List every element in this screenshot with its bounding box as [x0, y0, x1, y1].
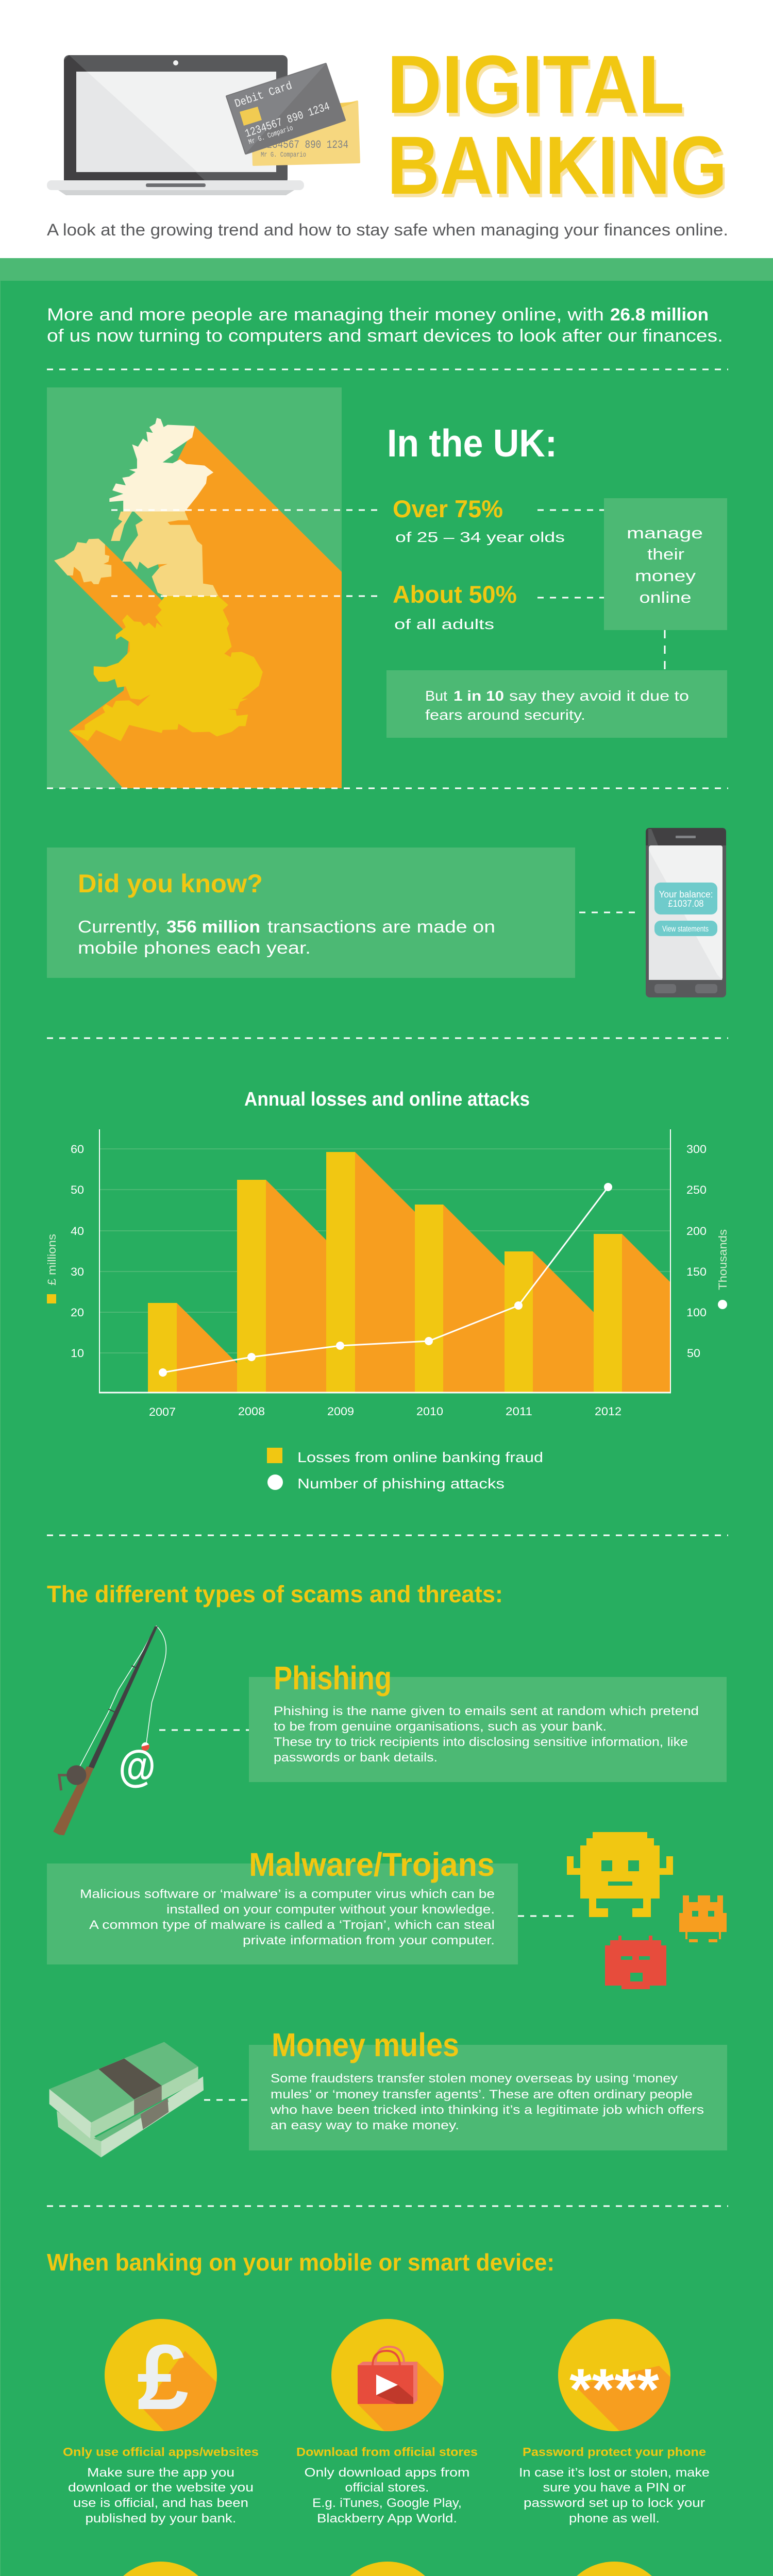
right axis labels: 200 — [686, 1225, 707, 1238]
icon: IMEI — [577, 2562, 652, 2576]
tip: password protect: phone as well. — [569, 2512, 660, 2526]
tip: official apps — [63, 2319, 259, 2526]
right axis labels: 150 — [686, 1265, 707, 1278]
title: DIGITAL — [389, 42, 686, 134]
left axis labels — [71, 1143, 84, 1360]
title: BANKING — [387, 119, 727, 211]
right axis labels: 300 — [686, 1143, 707, 1156]
balance button: Your balance: — [659, 889, 713, 900]
bars: online banking fraud losses — [148, 1152, 622, 1392]
right axis labels — [686, 1143, 707, 1360]
panel: malware: Malicious software or ‘malware’ is a computer virus which can be — [80, 1887, 495, 1901]
icon: phone — [646, 828, 726, 997]
chart title: Annual losses and online attacks — [244, 1089, 530, 1110]
tip: official apps: use is official, and has been — [73, 2496, 248, 2510]
chart legend: Number of phishing attacks — [297, 1476, 505, 1492]
icon: money stack — [49, 2042, 204, 2157]
icon: grey debit card: 1234567 890 1234 — [243, 100, 331, 141]
tip: password protect: password set up to lock your — [524, 2496, 705, 2510]
panel: 1 in 10: 1 in 10 — [453, 688, 504, 704]
panel: money mules: an easy way to make money. — [271, 2119, 459, 2132]
panel: phishing: Phishing is the name given to emails sent at random which pretend — [274, 1704, 699, 1718]
panel: money mules: who have been tricked into thinking it’s a legitimate job which offers — [270, 2103, 704, 2117]
heading: In the UK: In the UK: — [387, 421, 557, 465]
icon: shopping bag — [331, 2319, 444, 2431]
balance button: £1037.08 — [668, 899, 704, 909]
tip: official stores: Only download apps from — [304, 2466, 470, 2480]
right axis title: Thousands — [716, 1229, 729, 1290]
intro text — [47, 305, 723, 346]
tip: official stores: E.g. iTunes, Google Play, — [312, 2496, 462, 2510]
year labels: 2008 — [238, 1405, 265, 1418]
tip: official stores: Blackberry App World. — [317, 2512, 457, 2526]
panel: did you know: mobile phones each year. — [78, 938, 311, 957]
bar shadows — [177, 1152, 670, 1392]
icon: fishing rod — [53, 1626, 166, 1835]
intro text: 26.8 million — [610, 305, 709, 325]
icon: orange monster — [679, 1895, 727, 1942]
tip: official apps: download or the website you — [68, 2481, 254, 2495]
panel: manage their money online: their — [647, 545, 684, 563]
icon: red monster — [605, 1936, 666, 1989]
tip: official stores: official stores. — [345, 2481, 429, 2495]
panel: did you know: 356 million — [166, 917, 260, 936]
panel: phishing: Phishing — [274, 1659, 392, 1697]
icon: yellow bank card: Mr G. Compario — [261, 151, 306, 159]
icon: refresh arrows — [123, 2562, 198, 2576]
panel: did you know: transactions are made on — [267, 917, 495, 936]
tip: write down IMEI — [577, 2562, 652, 2576]
panel: malware — [47, 1846, 518, 1964]
panel: money mules: mules’ or ‘money transfer agents’. These are often ordinary people — [271, 2088, 693, 2102]
icon: reset button — [350, 2562, 425, 2576]
icon: grey debit card — [227, 64, 345, 154]
map of the UK — [54, 418, 263, 741]
map shadow — [54, 426, 342, 788]
left axis labels: 50 — [71, 1183, 84, 1196]
panel: malware: installed on your computer without your knowledge. — [166, 1903, 495, 1917]
panel: manage their money online: online — [639, 588, 692, 606]
line: phishing attacks — [159, 1183, 612, 1377]
intro text: of us now turning to computers and smart devices to look after our finances. — [47, 326, 723, 346]
panel: did you know: Did you know? — [78, 869, 263, 898]
stat: over 75%: of 25 – 34 year olds — [395, 529, 565, 545]
year labels: 2010 — [416, 1405, 443, 1418]
icon: pound sign: £ — [137, 2326, 189, 2429]
panel: 1 in 10: But — [425, 688, 447, 704]
panel: money mules: Some fraudsters transfer stolen money overseas by using ‘money — [271, 2072, 678, 2086]
right axis labels: 50 — [687, 1347, 700, 1360]
tip: password protect: Password protect your phone — [523, 2445, 706, 2459]
chart legend: Losses from online banking fraud — [297, 1449, 543, 1465]
icon: fishing rod: @ — [119, 1742, 156, 1791]
stat: about 50% — [393, 581, 517, 632]
icon: yellow bank card: 1234567 890 1234 — [261, 139, 348, 151]
tip: password protect: sure you have a PIN or — [543, 2481, 685, 2495]
title: BANKING — [389, 123, 729, 215]
left axis labels: 40 — [71, 1225, 84, 1238]
heading: mobile or smart device: When banking on your mobile or smart device: — [47, 2249, 554, 2276]
panel: 1 in 10: fears around security. — [425, 707, 585, 723]
left axis title: £ millions — [45, 1234, 58, 1285]
subtitle: A look at the growing trend and how to stay safe when managing your finances online. — [47, 221, 728, 239]
title — [387, 38, 729, 215]
stat: about 50%: About 50% — [393, 581, 517, 608]
panel: money mules: Money mules — [272, 2026, 459, 2063]
panel: did you know — [47, 848, 575, 978]
icon: yellow bank card — [253, 101, 359, 165]
tip: official apps: published by your bank. — [86, 2512, 236, 2526]
panel: phishing: to be from genuine organisations, such as your bank. — [274, 1720, 607, 1734]
tip: password protect: In case it’s lost or stolen, make — [519, 2466, 710, 2480]
left axis labels: 10 — [71, 1347, 84, 1360]
balance button — [654, 883, 717, 914]
title: DIGITAL — [387, 38, 684, 130]
intro text: More and more people are managing their money online, with — [47, 305, 604, 325]
panel: manage their money online — [604, 498, 727, 630]
panel: phishing: passwords or bank details. — [274, 1751, 438, 1765]
icon: password asterisks: **** — [569, 2357, 659, 2421]
panel: malware: Malware/Trojans — [249, 1846, 495, 1883]
panel: malware: private information from your computer. — [243, 1934, 495, 1947]
icon: grey debit card: Mr G. Compario — [248, 124, 294, 147]
panel: malware: A common type of malware is called a ‘Trojan’, which can steal — [89, 1918, 495, 1932]
tip: official apps: Make sure the app you — [87, 2466, 234, 2480]
year labels: 2007 — [149, 1405, 176, 1418]
panel: phishing — [249, 1659, 727, 1782]
tip: official stores: Download from official stores — [296, 2445, 478, 2459]
panel: did you know: Currently, — [78, 917, 160, 936]
chart legend — [267, 1448, 543, 1492]
tip: keep updated — [123, 2562, 198, 2576]
panel: UK map — [47, 387, 342, 788]
stat: over 75%: Over 75% — [393, 495, 503, 522]
year labels: 2011 — [506, 1405, 532, 1418]
right axis labels: 250 — [686, 1183, 707, 1196]
tip: password protect — [519, 2319, 717, 2526]
left axis title — [45, 1234, 58, 1303]
icon: password asterisks — [558, 2319, 670, 2431]
stat: about 50%: of all adults — [394, 616, 494, 632]
left axis labels: 60 — [71, 1143, 84, 1156]
panel: manage their money online: manage — [627, 524, 703, 542]
panel: 1 in 10: say they avoid it due to — [509, 688, 689, 704]
year labels: 2009 — [327, 1405, 354, 1418]
view statements button — [654, 921, 717, 936]
icon: grey debit card: Debit Card — [233, 79, 294, 111]
panel: 1 in 10 — [386, 670, 727, 738]
left axis labels: 30 — [71, 1265, 84, 1278]
tip: factory reset — [350, 2562, 425, 2576]
icon: pound sign — [105, 2319, 217, 2431]
year labels: 2012 — [595, 1405, 621, 1418]
panel: phishing: These try to trick recipients into disclosing sensitive information, like — [274, 1735, 688, 1749]
left axis labels: 20 — [71, 1306, 84, 1319]
tip: official apps: Only use official apps/websites — [63, 2445, 259, 2459]
heading: scams and threats: The different types of scams and threats: — [47, 1581, 503, 1607]
tip: official stores — [296, 2319, 491, 2526]
stat: over 75% — [393, 495, 565, 545]
right axis labels: 100 — [686, 1306, 707, 1319]
icon: yellow monster — [567, 1832, 673, 1917]
panel: money mules — [249, 2026, 727, 2150]
icon: laptop — [47, 55, 304, 195]
combo chart: annual losses and phishing attacks — [45, 1129, 729, 1418]
year labels — [149, 1405, 621, 1418]
panel: manage their money online: money — [635, 567, 696, 585]
view statements button: View statements — [662, 925, 709, 934]
